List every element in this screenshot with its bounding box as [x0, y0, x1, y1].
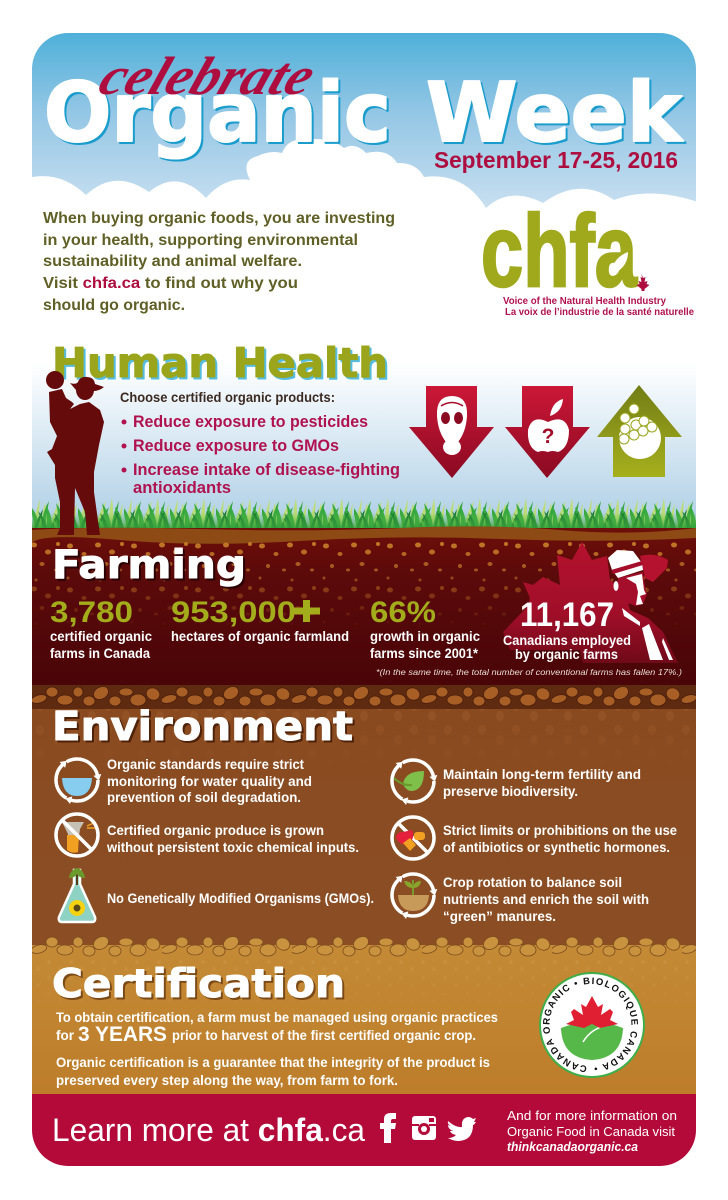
footer: more information: And for more information on — [507, 1109, 677, 1123]
item: crop rotation: “green” manures. — [443, 909, 556, 924]
item: antibiotics and hormones: Strict limits or prohibitions on the use — [443, 823, 677, 838]
title: Organic Week: Organic — [46, 68, 393, 163]
title: Organic Week: Organic — [44, 66, 391, 161]
intro text: Visit chfa.ca to find out why you — [43, 275, 298, 292]
maple leaf mark — [636, 274, 650, 291]
farmer brim — [640, 555, 668, 582]
icon: instagram — [412, 1116, 436, 1140]
stat: 3,780 farms: 3,780 — [50, 596, 133, 629]
chfa logo: chfa — [481, 194, 638, 308]
footer: more information — [507, 1109, 677, 1154]
stat: 953,000+ hectares — [171, 596, 349, 644]
cloud — [32, 139, 696, 208]
item: water quality — [56, 757, 312, 805]
item: crop rotation: nutrients and enrich the soil with — [443, 892, 649, 907]
icon: crop cycle — [392, 874, 437, 919]
footnote: *(In the same time, the total number of conventional farms has fallen 17%.) — [376, 667, 682, 677]
footer: more information: thinkcanadaorganic.ca — [507, 1140, 638, 1154]
grass — [32, 498, 696, 528]
icon: twitter — [448, 1117, 476, 1141]
icon: down arrow with gas mask — [409, 386, 494, 478]
bullet list — [122, 413, 400, 497]
item: water quality: monitoring for water quality and — [107, 774, 312, 789]
stat: 953,000+ hectares: hectares of organic farmland — [171, 629, 349, 644]
icon: down arrow with apple — [505, 386, 590, 478]
heading: Certification: Certification — [54, 964, 347, 1009]
stat: 11,167 employed: 11,167 — [520, 596, 614, 634]
intro text: sustainability and animal welfare. — [43, 253, 302, 270]
stat: 11,167 employed: Canadians employed — [503, 633, 631, 648]
stat: 11,167 employed: by organic farms — [515, 647, 618, 662]
item: antibiotics and hormones — [392, 817, 677, 859]
icon: no pills — [392, 817, 434, 859]
item: fertility and biodiversity: preserve biodiversity. — [443, 784, 578, 799]
icon: facebook — [380, 1113, 396, 1143]
heading: Certification: Certification — [52, 962, 345, 1007]
badge: Canada Organic — [539, 972, 645, 1078]
leaf in logo — [612, 252, 628, 274]
stat: 66% growth — [370, 596, 480, 661]
intro text: in your health, supporting environmental — [43, 232, 358, 249]
heading: Farming: Farming — [52, 543, 246, 588]
icon: no spray — [56, 814, 98, 856]
text: certification body: for — [56, 1028, 75, 1043]
bullet list: Reduce exposure to pesticides — [133, 413, 368, 431]
rock band light — [32, 936, 696, 956]
icon: up arrow with antioxidant cell — [597, 385, 682, 477]
stat: 3,780 farms: farms in Canada — [50, 646, 150, 661]
bullet list: Increase intake of disease-fighting — [133, 461, 400, 479]
item: crop rotation: Crop rotation to balance soil — [443, 875, 622, 890]
text: certification body: Organic certification is a guarantee that the integrity of the product is — [56, 1055, 490, 1070]
item: crop rotation — [392, 874, 649, 924]
maple leaf — [503, 542, 678, 663]
farmer face — [617, 572, 647, 606]
text: choose certified organic: Choose certified organic products: — [120, 390, 335, 405]
stat: 66% growth: 66% — [370, 596, 436, 629]
item: fertility and biodiversity: Maintain long-term fertility and — [443, 767, 641, 782]
footer: more information: Organic Food in Canada visit — [507, 1125, 676, 1139]
stat: 66% growth: farms since 2001* — [370, 646, 479, 661]
panel: human health background — [32, 380, 696, 528]
text: certification body: 3 YEARS — [78, 1023, 167, 1046]
item: no toxic chemicals: without persistent toxic chemical inputs. — [106, 840, 359, 855]
heading: Farming: Farming — [54, 545, 248, 590]
bullet list: Reduce exposure to GMOs — [133, 437, 339, 455]
badge ring text: CANADA ORGANIC • BIOLOGIQUE CANADA • — [542, 978, 638, 1072]
panel: footer background — [32, 1094, 696, 1166]
stat: 953,000+ hectares: 953,000 — [171, 596, 296, 629]
rock band — [32, 685, 696, 709]
item: antibiotics and hormones: of antibiotics or synthetic hormones. — [443, 840, 670, 855]
icon: flask — [59, 868, 95, 922]
heading: Environment: Environment — [52, 704, 353, 750]
badge maple leaf — [566, 996, 618, 1028]
text: certification body — [56, 1010, 498, 1088]
text: certification body: To obtain certification, a farm must be managed using organic practices — [56, 1010, 498, 1025]
title: celebrate: celebrate — [91, 47, 323, 107]
title: Organic Week: Week — [428, 68, 686, 163]
stat: 3,780 farms: certified organic — [50, 629, 152, 644]
stat: 66% growth: growth in organic — [370, 629, 480, 644]
stat: 3,780 farms — [50, 596, 152, 661]
bullet list: antioxidants — [133, 479, 231, 497]
farmer collar and shirt — [622, 608, 640, 626]
text: certification body: preserved every step along the way, from farm to fork. — [56, 1073, 398, 1088]
heading: Human Health: Human Health — [52, 339, 388, 387]
item: no toxic chemicals: Certified organic produce is grown — [107, 823, 324, 838]
item: no GMOs: No Genetically Modified Organisms (GMOs). — [107, 891, 374, 906]
item: no toxic chemicals — [56, 814, 359, 856]
item: fertility and biodiversity — [392, 760, 641, 805]
panel: environment soil — [32, 695, 696, 945]
item: water quality: Organic standards require strict — [107, 757, 304, 772]
silhouette: parent and child — [46, 371, 104, 535]
badge green field — [561, 1022, 623, 1060]
icon: water cycle — [56, 759, 101, 804]
title: Organic Week: Week — [426, 66, 684, 161]
footer: learn more: Learn more at chfa.ca — [52, 1112, 365, 1148]
panel: sky header — [32, 33, 696, 208]
heading: Human Health: Human Health — [54, 341, 390, 389]
item: water quality: prevention of soil degradation. — [107, 790, 301, 805]
icon: leaf cycle — [392, 760, 437, 805]
text: certification body: prior to harvest of the first certified organic crop. — [172, 1028, 476, 1043]
intro text — [43, 210, 395, 314]
farmer hat — [608, 550, 643, 578]
illustration: maple leaf and farmer — [503, 542, 678, 663]
chfa logo: Voice of the Natural Health Industry — [503, 296, 666, 307]
date: September 17-25, 2016 — [434, 147, 678, 173]
heading: Environment: Environment — [54, 706, 355, 752]
intro text: should go organic. — [43, 297, 185, 314]
chfa logo: La voix de l’industrie de la santé naturelle — [505, 307, 694, 318]
panel: certification background — [32, 945, 696, 1095]
title: Organic Week — [44, 66, 686, 163]
panel: farming soil — [32, 526, 696, 700]
icon: down arrow with apple: ? — [542, 425, 554, 448]
item: no GMOs — [59, 868, 374, 922]
stat: 11,167 employed — [503, 596, 631, 662]
intro text: When buying organic foods, you are investing — [43, 210, 395, 227]
